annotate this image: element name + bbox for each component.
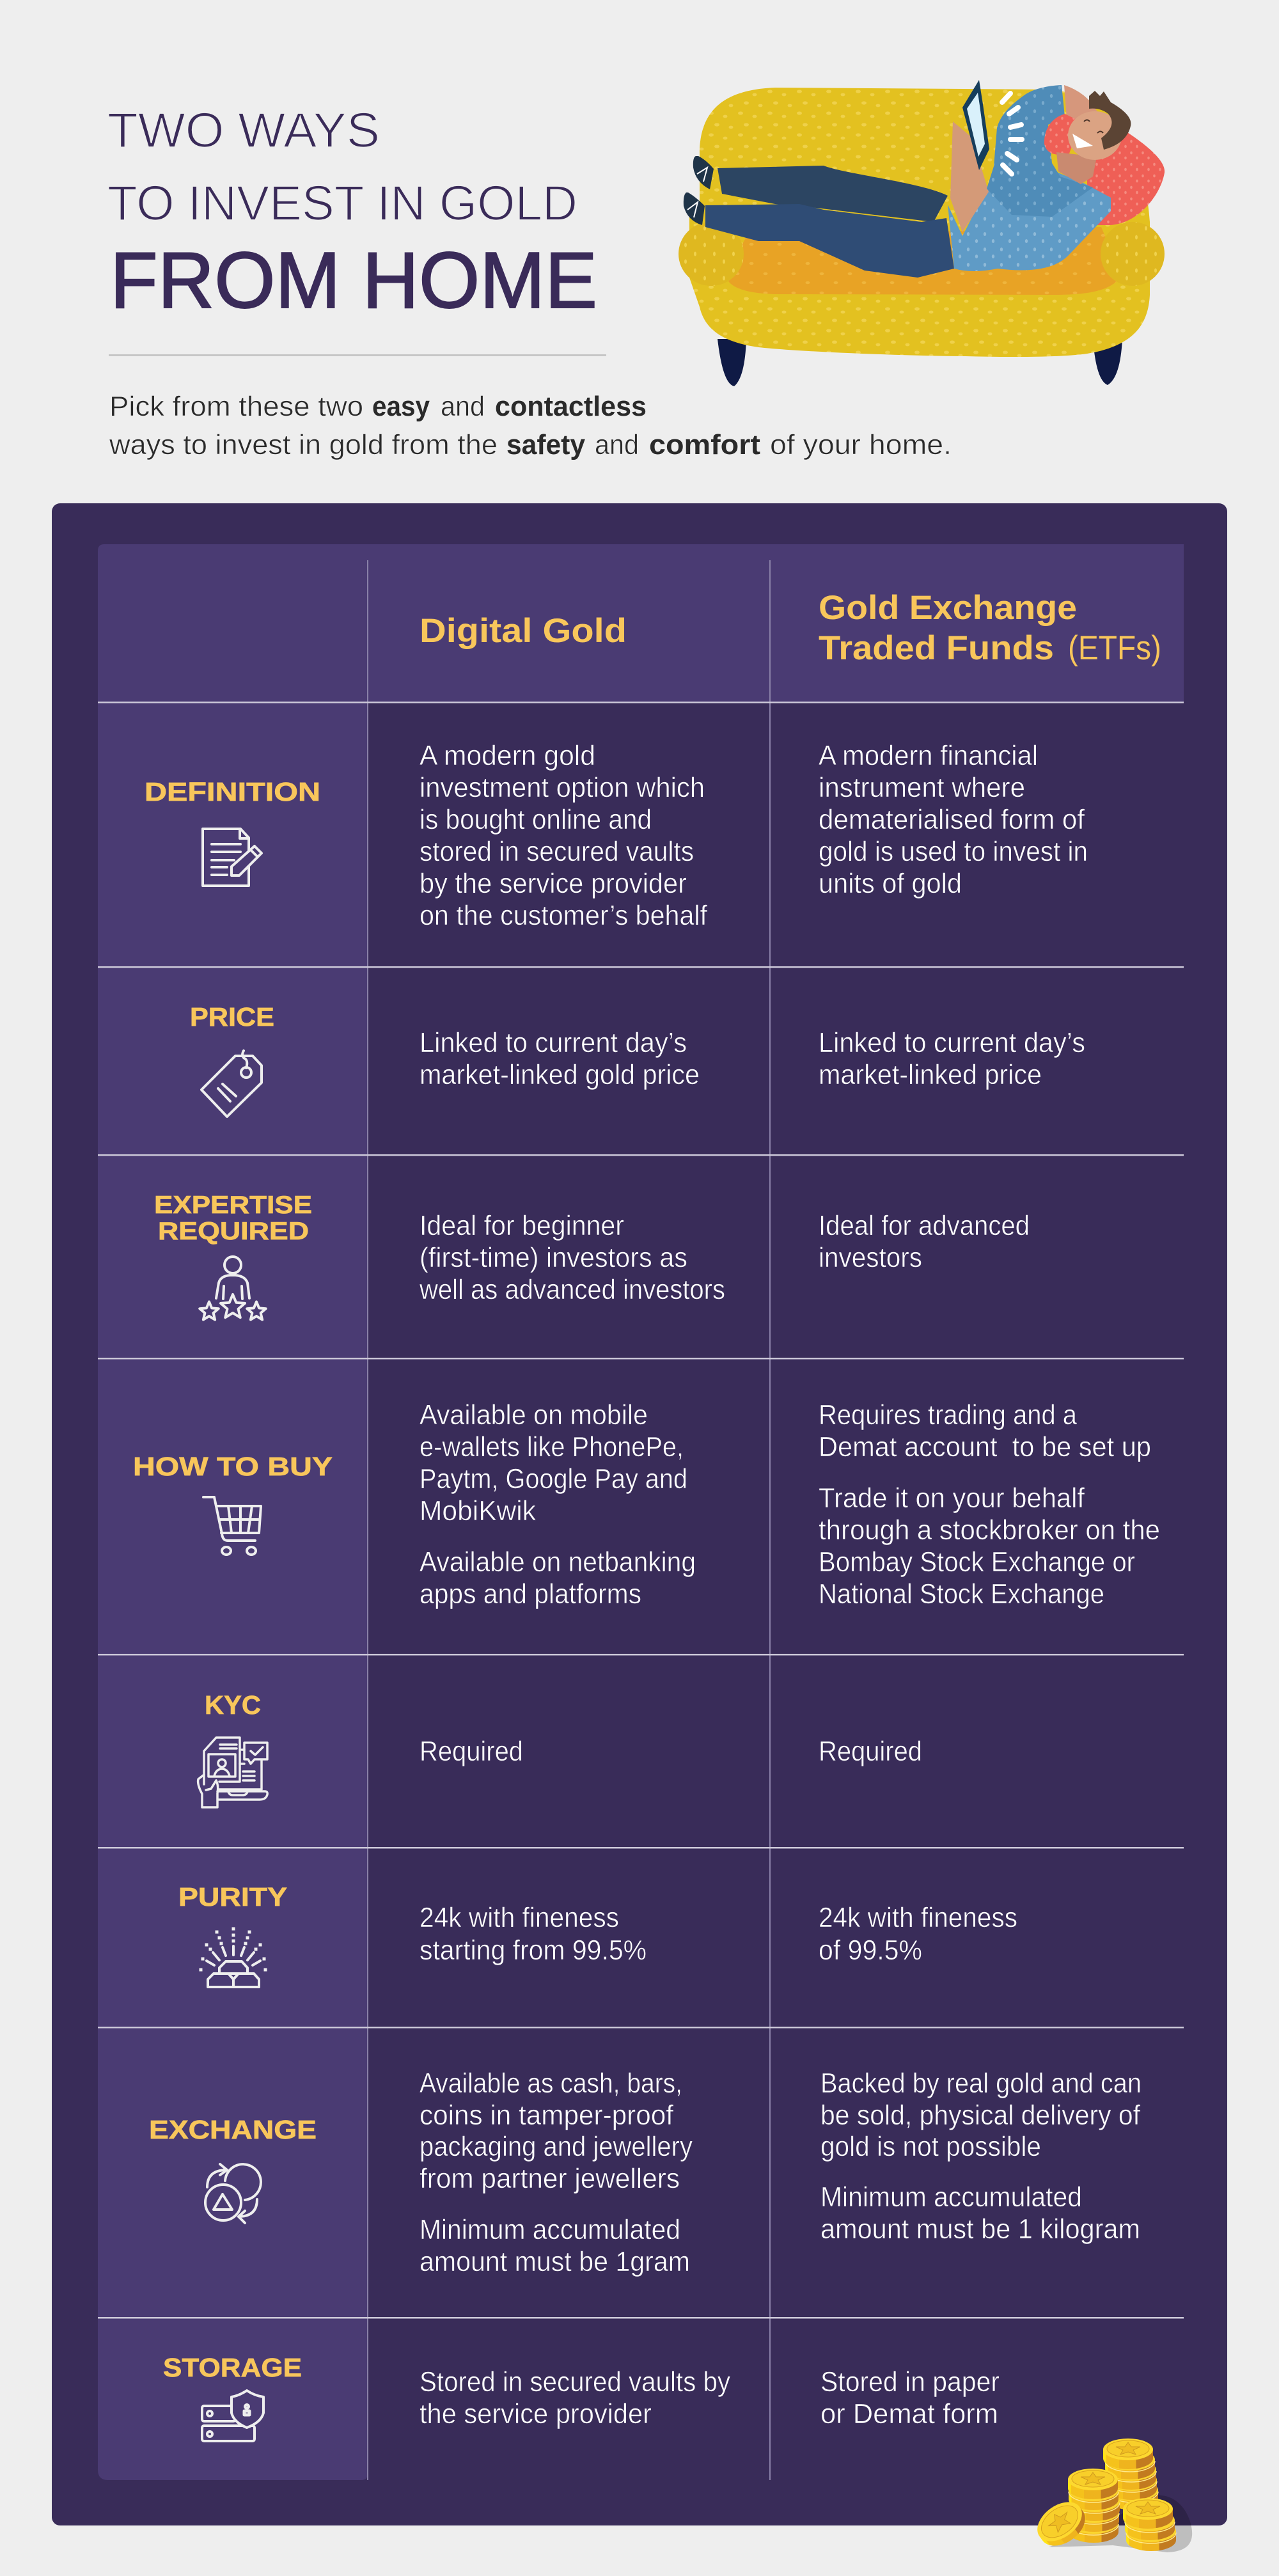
gold etf exchange xyxy=(820,2068,1142,2245)
title: FROM HOME xyxy=(110,237,597,325)
intro text: easy xyxy=(372,391,430,422)
gold etf price: Linked to current day’s xyxy=(819,1027,1085,1058)
gold etf price: market-linked price xyxy=(819,1059,1042,1090)
row: definition xyxy=(145,740,1088,931)
digital gold exchange: packaging and jewellery xyxy=(420,2131,693,2162)
label: how to buy: HOW TO BUY xyxy=(133,1452,333,1481)
title: TO INVEST IN GOLD xyxy=(107,176,577,231)
gold etf definition: instrument where xyxy=(819,772,1025,803)
intro text: of your home. xyxy=(770,429,952,460)
icon: price tag xyxy=(201,1051,262,1117)
digital gold purity: 24k with fineness xyxy=(420,1902,619,1933)
sofa legs xyxy=(718,339,1122,386)
digital gold definition: stored in secured vaults xyxy=(420,836,694,867)
digital gold expertise: (first-time) investors as xyxy=(420,1242,687,1273)
gold etf kyc: Required xyxy=(819,1736,922,1767)
gold etf how to buy: through a stockbroker on the xyxy=(819,1514,1160,1546)
label: exchange: EXCHANGE xyxy=(149,2115,317,2144)
gold etf how to buy: Bombay Stock Exchange or xyxy=(819,1546,1135,1578)
title xyxy=(107,103,597,325)
label: expertise required: REQUIRED xyxy=(158,1218,309,1245)
icon: stack of gold coins xyxy=(1030,2439,1192,2554)
panel: table header and label column xyxy=(98,544,1184,2480)
gold etf exchange: Backed by real gold and can xyxy=(820,2068,1142,2099)
header: gold exchange traded funds: (ETFs) xyxy=(1068,629,1161,667)
sofa seat xyxy=(726,227,1122,295)
digital gold how to buy: Paytm, Google Pay and xyxy=(420,1463,687,1495)
intro text xyxy=(109,391,952,460)
divider rule xyxy=(109,354,606,356)
pillow xyxy=(1087,131,1165,225)
gold etf expertise: Ideal for advanced xyxy=(819,1210,1030,1241)
illustration: man lying on yellow sofa with tablet xyxy=(679,80,1165,386)
gold etf how to buy: Requires trading and a xyxy=(819,1399,1077,1431)
digital gold definition: investment option which xyxy=(420,772,705,803)
digital gold kyc: Required xyxy=(420,1736,523,1767)
gold etf definition: units of gold xyxy=(819,868,962,899)
label: purity: PURITY xyxy=(178,1882,287,1912)
digital gold how to buy: apps and platforms xyxy=(420,1578,641,1610)
neck xyxy=(1056,152,1097,184)
label: storage: STORAGE xyxy=(163,2353,302,2382)
digital gold price: market-linked gold price xyxy=(420,1059,700,1090)
gold etf how to buy xyxy=(819,1399,1160,1610)
icon: shopping cart xyxy=(203,1497,261,1555)
panel: comparison table background xyxy=(52,503,1227,2525)
digital gold exchange: Available as cash, bars, xyxy=(420,2068,682,2099)
row: exchange xyxy=(149,2068,1142,2277)
intro text: ways to invest in gold from the xyxy=(109,429,498,460)
header: gold exchange traded funds: Traded Funds xyxy=(819,629,1054,667)
label: price: PRICE xyxy=(190,1002,274,1032)
right armrest xyxy=(1101,222,1165,286)
intro text: and xyxy=(441,391,485,422)
row: kyc xyxy=(198,1690,922,1807)
column dividers xyxy=(367,560,771,2480)
smile xyxy=(1072,134,1093,148)
digital gold how to buy: MobiKwik xyxy=(420,1495,537,1527)
gold etf definition: dematerialised form of xyxy=(819,804,1085,835)
digital gold price: Linked to current day’s xyxy=(420,1027,687,1058)
row: purity xyxy=(178,1882,1017,1987)
forearm xyxy=(950,122,989,232)
gold etf definition xyxy=(819,740,1088,899)
intro text: and xyxy=(595,429,639,460)
row: expertise required xyxy=(154,1191,1030,1320)
icon: secure server xyxy=(202,2391,263,2441)
icon: person with three stars xyxy=(200,1257,266,1320)
digital gold expertise: well as advanced investors xyxy=(419,1274,725,1305)
intro text: Pick from these two xyxy=(109,391,363,422)
gold etf how to buy: Demat account to be set up xyxy=(819,1431,1151,1463)
icon: kyc document and laptop xyxy=(198,1738,267,1807)
digital gold definition: is bought online and xyxy=(420,804,652,835)
left armrest xyxy=(679,222,744,286)
digital gold definition: on the customer’s behalf xyxy=(420,900,708,931)
row: how to buy xyxy=(133,1399,1160,1610)
header: gold exchange traded funds xyxy=(819,589,1161,667)
gold etf definition: A modern financial xyxy=(819,740,1038,771)
gold etf expertise xyxy=(819,1210,1030,1273)
label: kyc: KYC xyxy=(205,1690,261,1720)
torso xyxy=(948,170,1111,271)
gold etf storage: Stored in paper xyxy=(820,2366,1000,2398)
label: definition: DEFINITION xyxy=(145,777,320,806)
gold etf exchange: amount must be 1 kilogram xyxy=(820,2213,1140,2245)
digital gold how to buy xyxy=(420,1399,696,1610)
header: gold exchange traded funds: Gold Exchange xyxy=(819,589,1077,627)
intro text: comfort xyxy=(649,429,760,460)
digital gold price xyxy=(420,1027,700,1090)
digital gold how to buy: Available on netbanking xyxy=(420,1546,696,1578)
gold etf storage: or Demat form xyxy=(820,2398,998,2430)
row dividers xyxy=(98,702,1184,2319)
gold etf price xyxy=(819,1027,1085,1090)
digital gold exchange: from partner jewellers xyxy=(420,2163,680,2194)
gold etf how to buy: Trade it on your behalf xyxy=(819,1482,1085,1514)
gold etf purity: of 99.5% xyxy=(819,1935,922,1966)
gold etf exchange: gold is not possible xyxy=(820,2131,1041,2162)
gold etf purity xyxy=(819,1902,1017,1966)
header: digital gold: Digital Gold xyxy=(420,612,627,650)
gold etf definition: gold is used to invest in xyxy=(819,836,1088,867)
icon: exchange coins xyxy=(205,2164,261,2223)
digital gold storage: Stored in secured vaults by xyxy=(420,2366,730,2398)
digital gold exchange: Minimum accumulated xyxy=(420,2214,680,2245)
arm behind head xyxy=(1064,85,1097,122)
digital gold expertise: Ideal for beginner xyxy=(420,1210,624,1241)
digital gold purity: starting from 99.5% xyxy=(420,1935,647,1966)
digital gold exchange: coins in tamper-proof xyxy=(420,2100,674,2131)
gold etf storage xyxy=(820,2366,1000,2430)
digital gold definition xyxy=(420,740,708,931)
back leg xyxy=(718,166,948,222)
intro text: contactless xyxy=(495,391,647,422)
raised sleeve xyxy=(987,85,1093,217)
pillow section beside head xyxy=(1044,114,1081,155)
intro text: safety xyxy=(506,429,586,460)
icon: document and pencil xyxy=(203,829,262,886)
digital gold storage: the service provider xyxy=(420,2398,652,2430)
shoes xyxy=(684,156,714,225)
title: TWO WAYS xyxy=(107,103,380,158)
row: storage xyxy=(163,2353,1000,2441)
gold etf how to buy: National Stock Exchange xyxy=(819,1578,1104,1610)
gold etf expertise: investors xyxy=(819,1242,922,1273)
row: price xyxy=(190,1002,1085,1117)
gold etf exchange: be sold, physical delivery of xyxy=(820,2100,1141,2131)
digital gold expertise xyxy=(419,1210,725,1305)
front leg xyxy=(705,204,954,278)
label: expertise required: EXPERTISE xyxy=(154,1191,312,1219)
sofa body xyxy=(689,88,1150,357)
digital gold definition: by the service provider xyxy=(420,868,687,899)
digital gold exchange: amount must be 1gram xyxy=(420,2246,690,2277)
tablet xyxy=(962,80,989,170)
sleeve highlights xyxy=(1002,93,1022,174)
gold etf exchange: Minimum accumulated xyxy=(820,2181,1082,2213)
label: expertise required xyxy=(154,1191,312,1245)
icon: shining gold bars xyxy=(200,1928,267,1987)
eyes xyxy=(1084,120,1103,133)
gold etf purity: 24k with fineness xyxy=(819,1902,1017,1933)
digital gold purity xyxy=(420,1902,647,1966)
face xyxy=(1068,111,1122,160)
digital gold exchange xyxy=(420,2068,693,2277)
digital gold how to buy: e-wallets like PhonePe, xyxy=(420,1431,684,1463)
hair xyxy=(1089,91,1131,150)
digital gold how to buy: Available on mobile xyxy=(420,1399,648,1431)
digital gold definition: A modern gold xyxy=(420,740,595,771)
digital gold storage xyxy=(420,2366,730,2430)
